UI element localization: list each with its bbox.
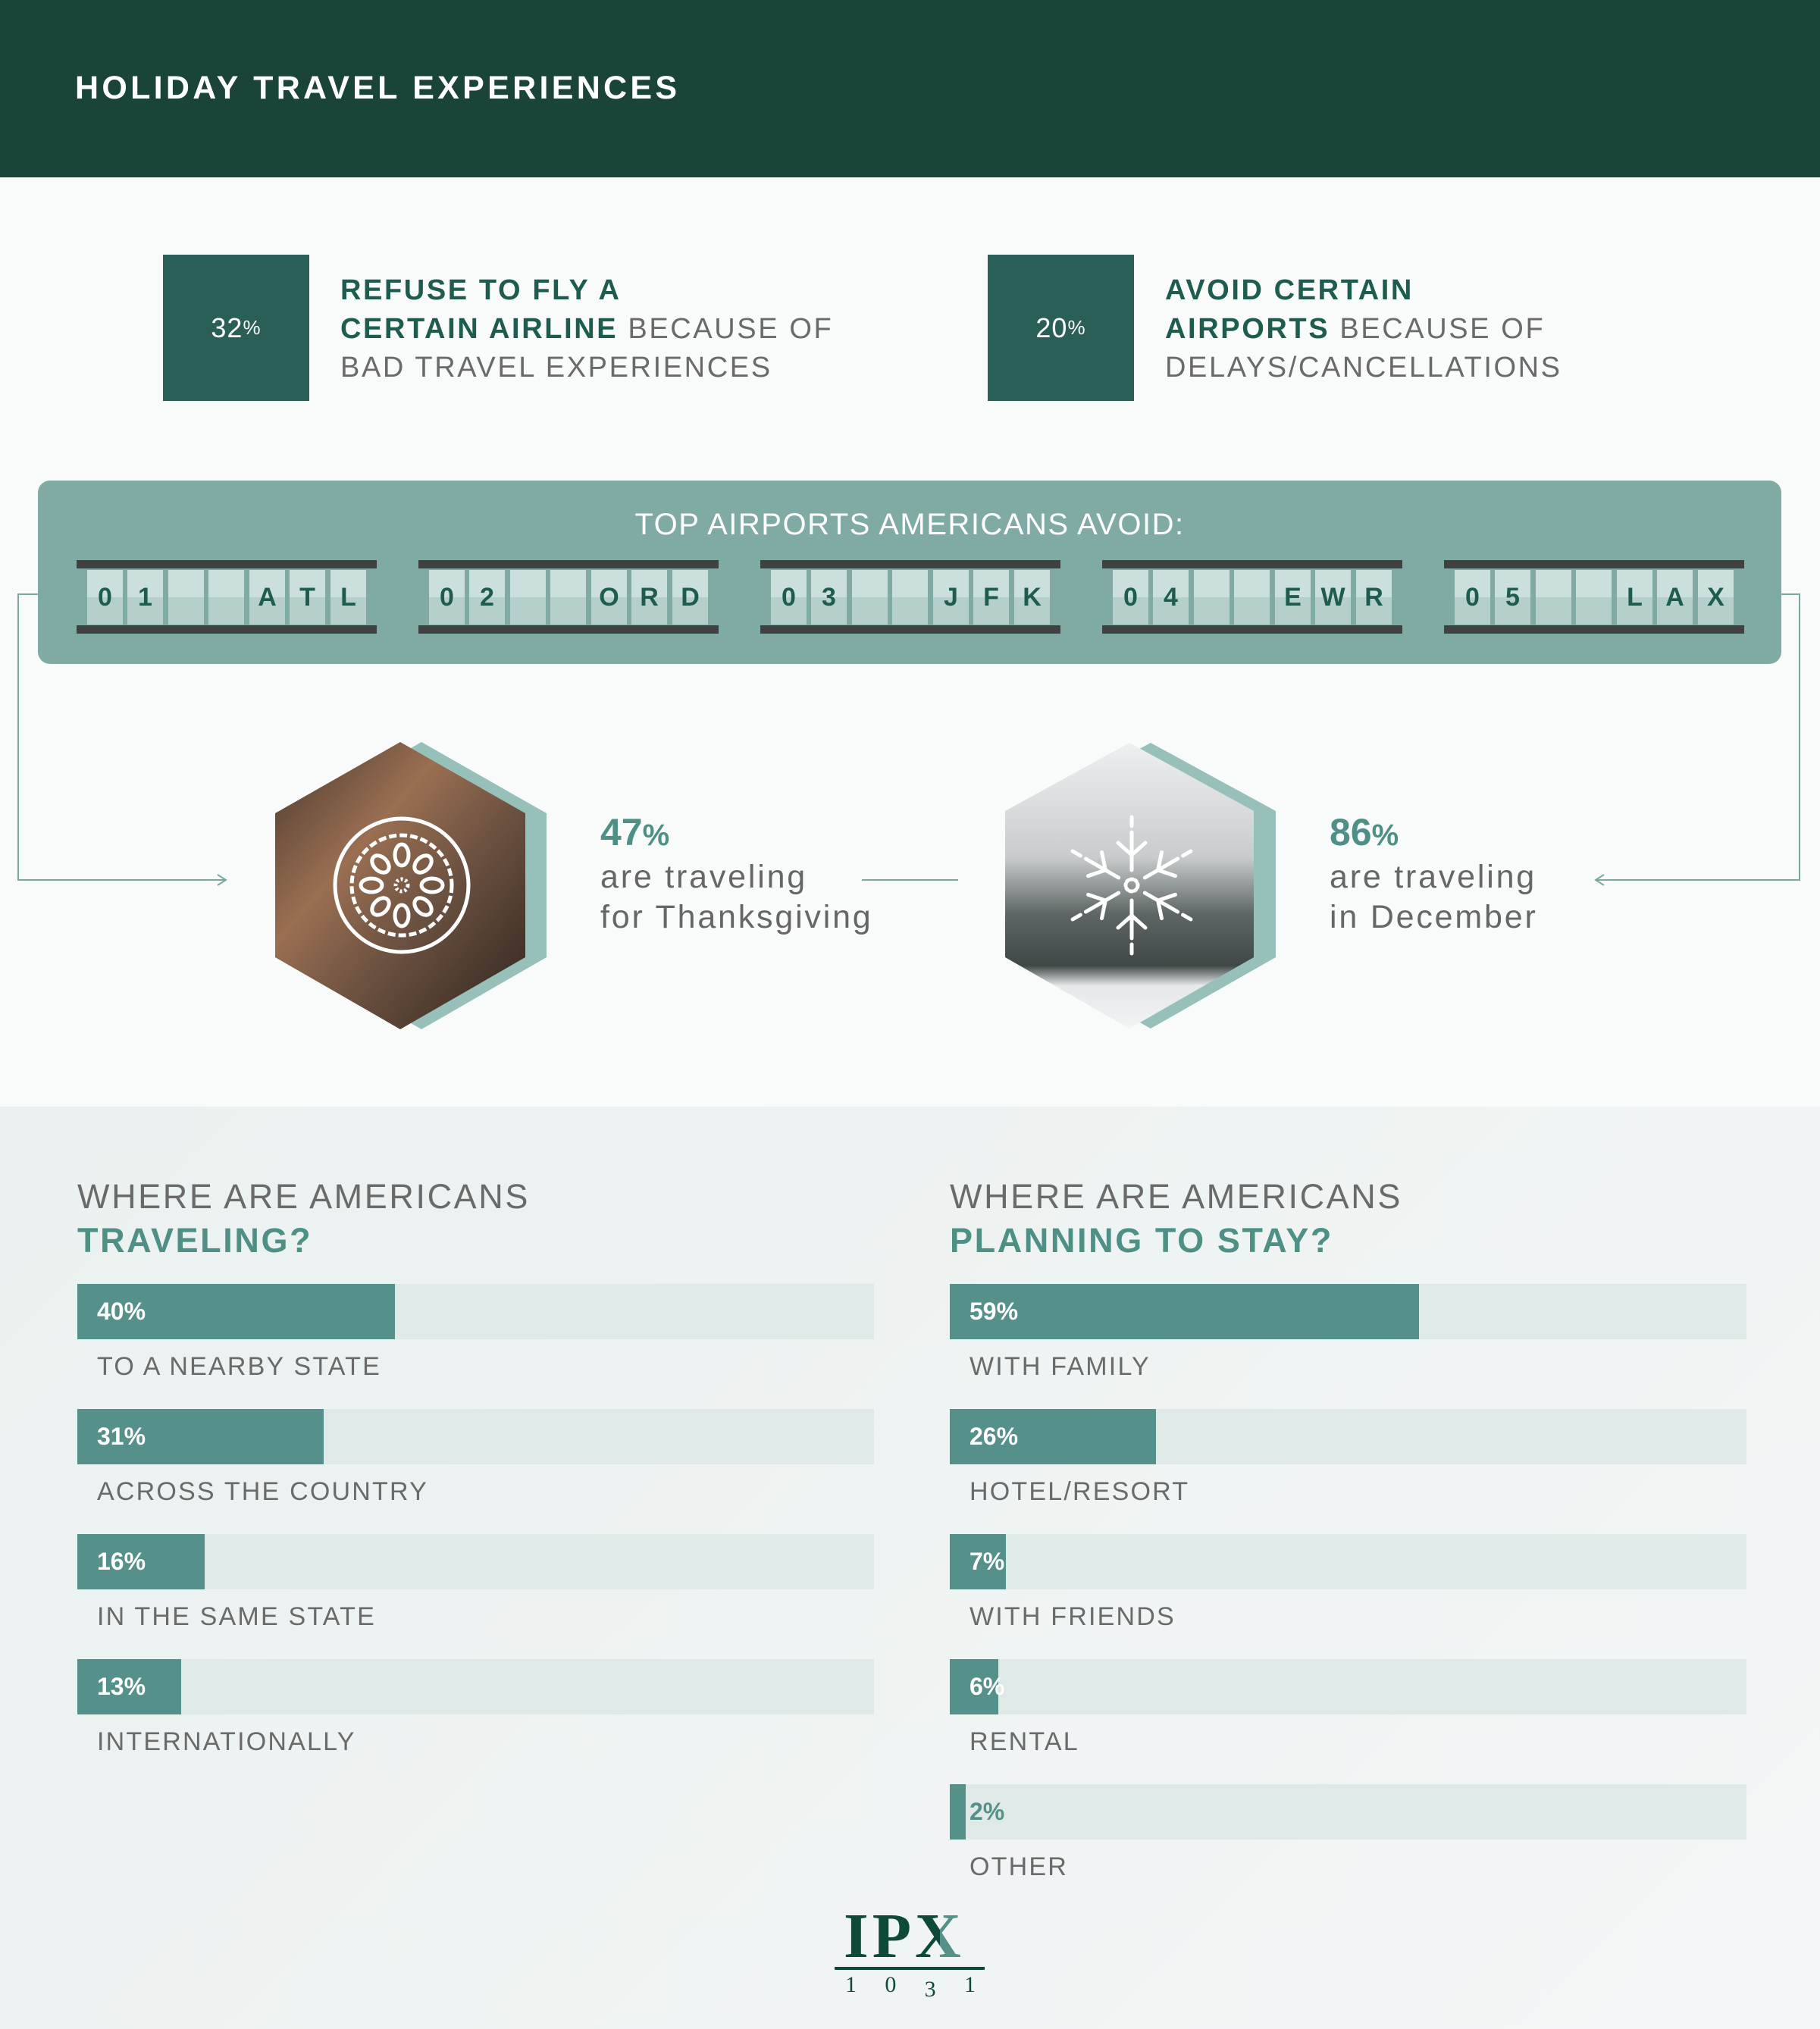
bar: 40% nearby state: TO A NEARBY STATE: [97, 1352, 381, 1381]
stat text airline: BAD TRAVEL EXPERIENCES: [340, 352, 772, 384]
board 01 ATL: 1: [138, 583, 152, 612]
chart heading: staying: WHERE ARE AMERICANS: [950, 1177, 1402, 1216]
board 04 EWR: [1102, 560, 1402, 634]
stat text airports: AVOID CERTAIN: [1165, 274, 1414, 306]
board 04 EWR: W: [1320, 583, 1345, 612]
board 05 LAX: L: [1627, 583, 1643, 612]
logo: IPX 1031: 1: [845, 1972, 857, 1997]
board 02 ORD: R: [640, 583, 659, 612]
stat box 32%: 32: [211, 312, 243, 343]
bar chart: where traveling: [77, 1284, 874, 1756]
bar: 59% family: 59%: [970, 1298, 1018, 1325]
text: 86% december: [1330, 811, 1538, 935]
board 01 ATL: T: [299, 583, 315, 612]
board 03 JFK: F: [983, 583, 999, 612]
text: 86% december: are traveling: [1330, 859, 1537, 895]
bar: 13% internationally: 13%: [97, 1673, 146, 1700]
board 04 EWR: E: [1284, 583, 1302, 612]
board 02 ORD: O: [599, 583, 619, 612]
text: 86% december: 86%: [1330, 811, 1399, 853]
bar: 31% across country: 31%: [97, 1423, 146, 1450]
logo: IPX 1031: 3: [925, 1977, 936, 2002]
bar: 16% same state: 16%: [97, 1548, 146, 1575]
stat box 32%: [163, 255, 309, 401]
board 05 LAX: A: [1665, 583, 1684, 612]
board 03 JFK: J: [944, 583, 958, 612]
chart heading: traveling: TRAVELING?: [77, 1221, 312, 1260]
stat text airline: [340, 274, 833, 384]
title: HOLIDAY TRAVEL EXPERIENCES: [75, 70, 680, 106]
bar: 16% same state: IN THE SAME STATE: [97, 1602, 376, 1631]
bar: 13% internationally: [77, 1659, 874, 1756]
logo: IPX 1031: IPX: [844, 1901, 965, 1971]
stat: 20% airports: [988, 255, 1562, 401]
board 01 ATL: L: [340, 583, 356, 612]
text: 47% thanksgiving: for Thanksgiving: [600, 899, 873, 935]
logo: IPX 1031: [835, 1901, 985, 2002]
stat text airports: AIRPORTS BECAUSE OF: [1165, 313, 1545, 345]
stat text airports: [1165, 274, 1562, 384]
board 01 ATL: A: [258, 583, 277, 612]
board 05 LAX: X: [1707, 583, 1724, 612]
board 05 LAX: [1444, 560, 1744, 634]
board 03 JFK: 3: [822, 583, 836, 612]
board 02 ORD: [418, 560, 719, 634]
bar: 7% friends: 7%: [970, 1548, 1004, 1575]
bar: 26% hotel: [950, 1409, 1746, 1506]
stat box 20%: %: [1067, 316, 1086, 339]
arrow: middle connector: [862, 879, 958, 881]
bar: 2% other: 2%: [970, 1798, 1004, 1825]
bar: 6% rental: [950, 1659, 1746, 1756]
hexagon: december snow: [1005, 743, 1276, 1029]
text: 47% thanksgiving: are traveling: [600, 859, 807, 895]
stat box 20%: 20: [1035, 312, 1067, 343]
board 01 ATL: 0: [98, 583, 112, 612]
bar: 13% internationally: INTERNATIONALLY: [97, 1727, 356, 1756]
bar: 2% other: OTHER: [970, 1852, 1068, 1881]
board 03 JFK: 0: [782, 583, 796, 612]
board 02 ORD: 0: [440, 583, 454, 612]
board 01 ATL: [77, 560, 377, 634]
bar: 59% family: WITH FAMILY: [970, 1352, 1151, 1381]
bar: 26% hotel: HOTEL/RESORT: [970, 1477, 1189, 1506]
bar: 26% hotel: 26%: [970, 1423, 1018, 1450]
logo: IPX 1031: 0: [885, 1972, 896, 1997]
board 04 EWR: R: [1364, 583, 1383, 612]
bar: 16% same state: [77, 1534, 874, 1631]
bar: 59% family: [950, 1284, 1746, 1381]
bar: 7% friends: WITH FRIENDS: [970, 1602, 1176, 1631]
arrow: right connector: [1596, 594, 1800, 885]
board 05 LAX: 5: [1505, 583, 1520, 612]
board 03 JFK: K: [1023, 583, 1042, 612]
stat text airline: CERTAIN AIRLINE BECAUSE OF: [340, 313, 833, 345]
connectors and hexagons: [17, 593, 1800, 1029]
panel: top airports: [38, 481, 1781, 664]
chart heading: traveling: [77, 1177, 530, 1260]
text: 47% thanksgiving: [600, 811, 873, 935]
hexagon: thanksgiving pie: [275, 742, 547, 1029]
icon: pie: [335, 819, 468, 952]
stat box 32%: %: [243, 316, 262, 339]
chart heading: staying: PLANNING TO STAY?: [950, 1221, 1333, 1260]
board 04 EWR: 4: [1164, 583, 1178, 612]
board 02 ORD: 2: [480, 583, 494, 612]
bar chart: where staying: [950, 1284, 1746, 1881]
header bar: [0, 0, 1820, 177]
logo: IPX 1031: 1: [964, 1972, 976, 1997]
text: 86% december: in December: [1330, 899, 1538, 935]
text: 47% thanksgiving: 47%: [600, 811, 669, 853]
stat box 20%: [988, 255, 1134, 401]
bar: 40% nearby state: 40%: [97, 1298, 146, 1325]
board 02 ORD: D: [681, 583, 700, 612]
arrow: left connector: [18, 594, 226, 885]
stat: 32% airline: [163, 255, 833, 401]
board 05 LAX: 0: [1465, 583, 1480, 612]
bar: 6% rental: RENTAL: [970, 1727, 1079, 1756]
stat text airports: DELAYS/CANCELLATIONS: [1165, 352, 1562, 384]
bar: 31% across country: ACROSS THE COUNTRY: [97, 1477, 428, 1506]
bar: 6% rental: 6%: [970, 1673, 1004, 1700]
board 04 EWR: 0: [1123, 583, 1138, 612]
bar: 2% other: [950, 1784, 1746, 1881]
board 03 JFK: [760, 560, 1060, 634]
bar: 40% nearby state: [77, 1284, 874, 1381]
bar: 31% across country: [77, 1409, 874, 1506]
chart heading: traveling: WHERE ARE AMERICANS: [77, 1177, 530, 1216]
icon: snowflake: [1066, 817, 1198, 953]
panel title: TOP AIRPORTS AMERICANS AVOID:: [634, 508, 1185, 541]
bar: 7% friends: [950, 1534, 1746, 1631]
bottom section background: [0, 1107, 1820, 2029]
chart heading: staying: [950, 1177, 1402, 1260]
stat text airline: REFUSE TO FLY A: [340, 274, 622, 306]
